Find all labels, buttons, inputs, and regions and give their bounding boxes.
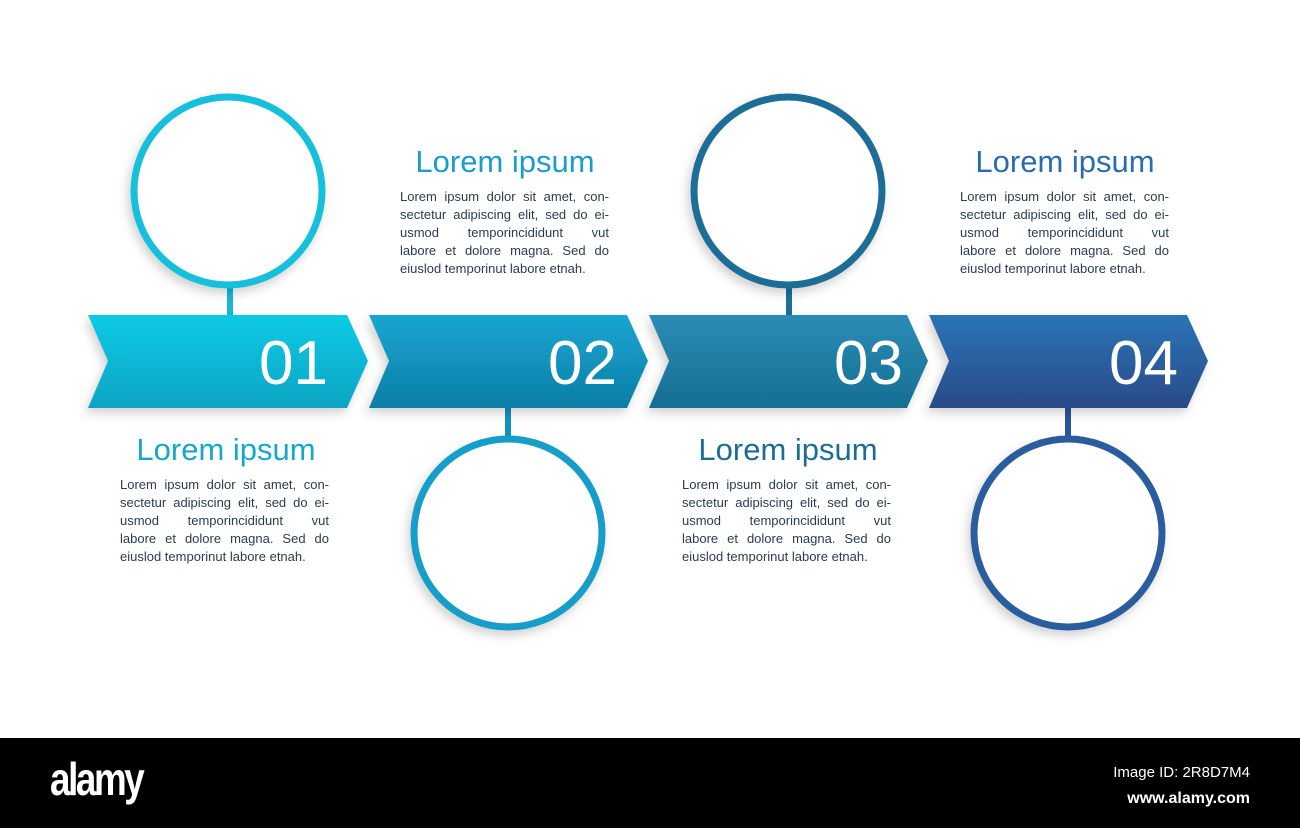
text 2: eiuslod temporinut labore etnah. (400, 261, 586, 276)
circle 2 (414, 439, 602, 627)
text 3: eiuslod temporinut labore etnah. (682, 549, 868, 564)
arrow 4: 04 (1109, 329, 1178, 398)
arrow 2: 02 (548, 329, 617, 398)
arrow 3 (649, 315, 928, 408)
text 4: usmod temporincididunt vut (960, 225, 1169, 240)
text 2: Lorem ipsum dolor sit amet, con- (400, 189, 609, 204)
text 1: Lorem ipsum dolor sit amet, con- (120, 477, 329, 492)
text 3: usmod temporincididunt vut (682, 513, 891, 528)
arrow 3: 03 (834, 329, 903, 398)
heading 1: Lorem ipsum (136, 432, 316, 467)
footer bar (0, 738, 1300, 828)
heading 2: Lorem ipsum (415, 144, 595, 179)
text 3: Lorem ipsum dolor sit amet, con- (682, 477, 891, 492)
text 1: eiuslod temporinut labore etnah. (120, 549, 306, 564)
arrow 1: 01 (259, 329, 328, 398)
text 1 (120, 477, 329, 564)
circle 1 (134, 97, 322, 285)
arrow 4 (929, 315, 1208, 408)
text 4 (960, 189, 1169, 276)
circle 4 (974, 439, 1162, 627)
stems (230, 285, 1068, 440)
circle 3 (694, 97, 882, 285)
text 2: usmod temporincididunt vut (400, 225, 609, 240)
text 3: labore et dolore magna. Sed do (682, 531, 891, 546)
arrow 2 (369, 315, 648, 408)
text 4: Lorem ipsum dolor sit amet, con- (960, 189, 1169, 204)
text 3: sectetur adipiscing elit, sed do ei- (682, 495, 891, 510)
image id: www.alamy.com (1127, 790, 1250, 807)
text 1: usmod temporincididunt vut (120, 513, 329, 528)
image id (1113, 764, 1250, 807)
text 4: labore et dolore magna. Sed do (960, 243, 1169, 258)
heading 3: Lorem ipsum (698, 432, 878, 467)
logo: alamy (50, 753, 142, 805)
text 4: sectetur adipiscing elit, sed do ei- (960, 207, 1169, 222)
text 2: sectetur adipiscing elit, sed do ei- (400, 207, 609, 222)
text 1: labore et dolore magna. Sed do (120, 531, 329, 546)
text 2 (400, 189, 609, 276)
text 2: labore et dolore magna. Sed do (400, 243, 609, 258)
image id: Image ID: 2R8D7M4 (1113, 764, 1250, 781)
text 4: eiuslod temporinut labore etnah. (960, 261, 1146, 276)
arrow 1 (88, 315, 368, 408)
heading 4: Lorem ipsum (975, 144, 1155, 179)
text 1: sectetur adipiscing elit, sed do ei- (120, 495, 329, 510)
text 3 (682, 477, 891, 564)
